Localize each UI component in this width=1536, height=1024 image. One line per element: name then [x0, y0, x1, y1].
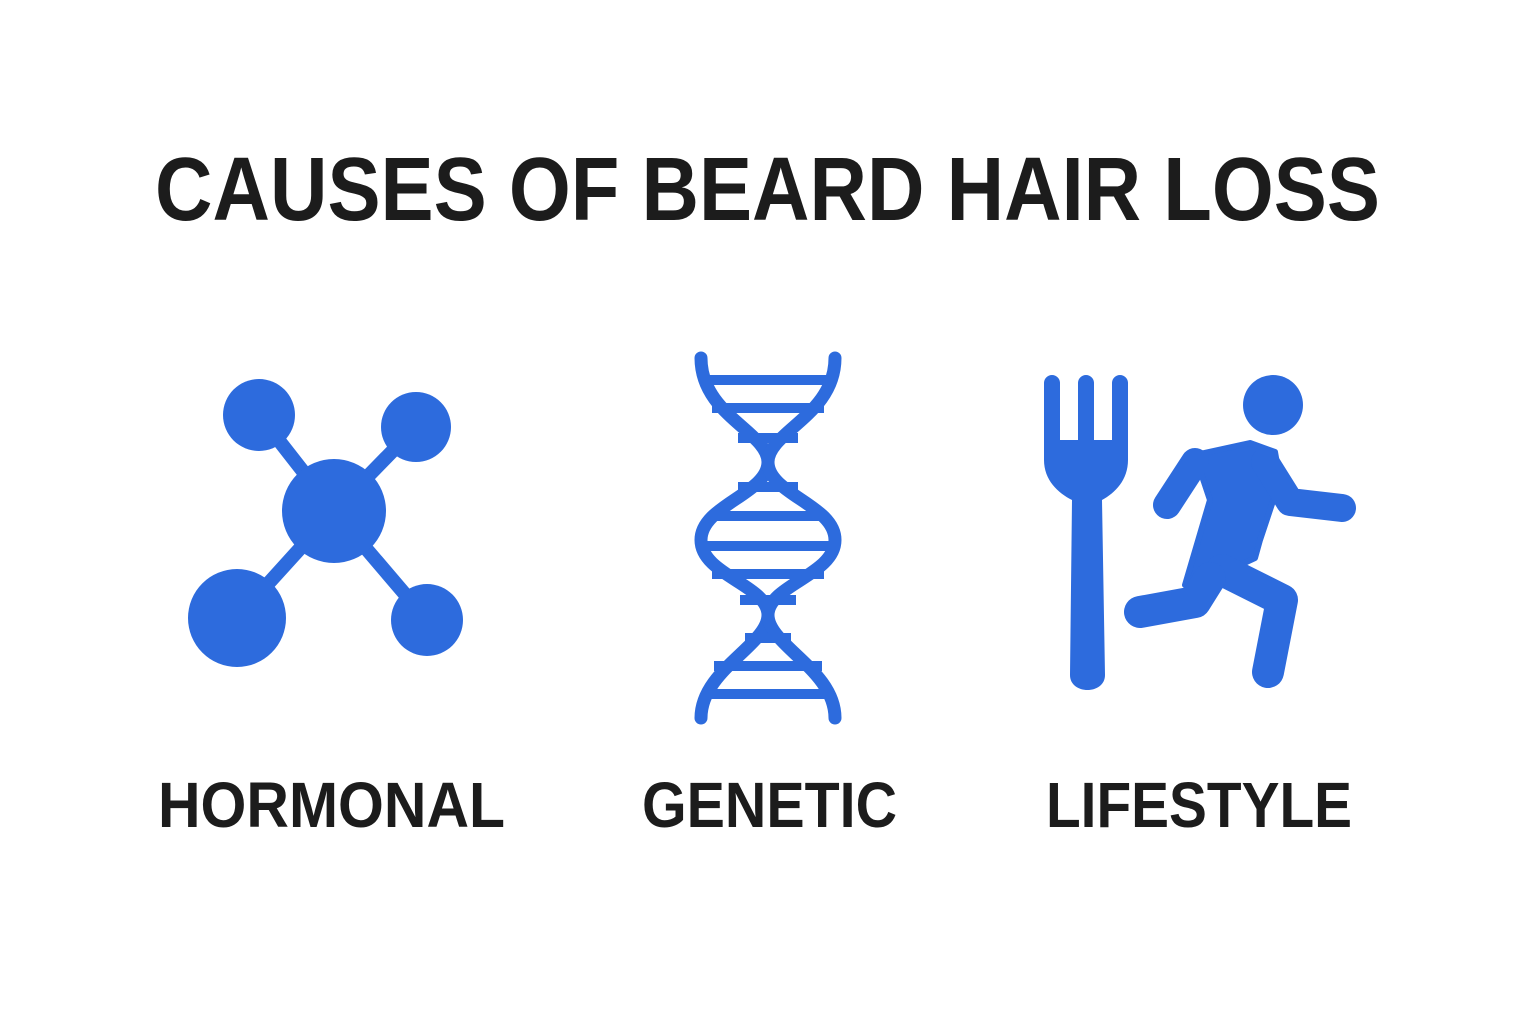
- icon: hormonal molecule: [188, 379, 463, 667]
- label: hormonal: HORMONAL: [158, 769, 505, 841]
- icon: DNA helix: [701, 358, 835, 718]
- icon: fork: [1044, 375, 1128, 690]
- label: genetic: GENETIC: [642, 769, 897, 841]
- title: CAUSES OF BEARD HAIR LOSS: [155, 140, 1380, 240]
- label: lifestyle: LIFESTYLE: [1046, 769, 1352, 841]
- icon: runner: [1140, 375, 1342, 672]
